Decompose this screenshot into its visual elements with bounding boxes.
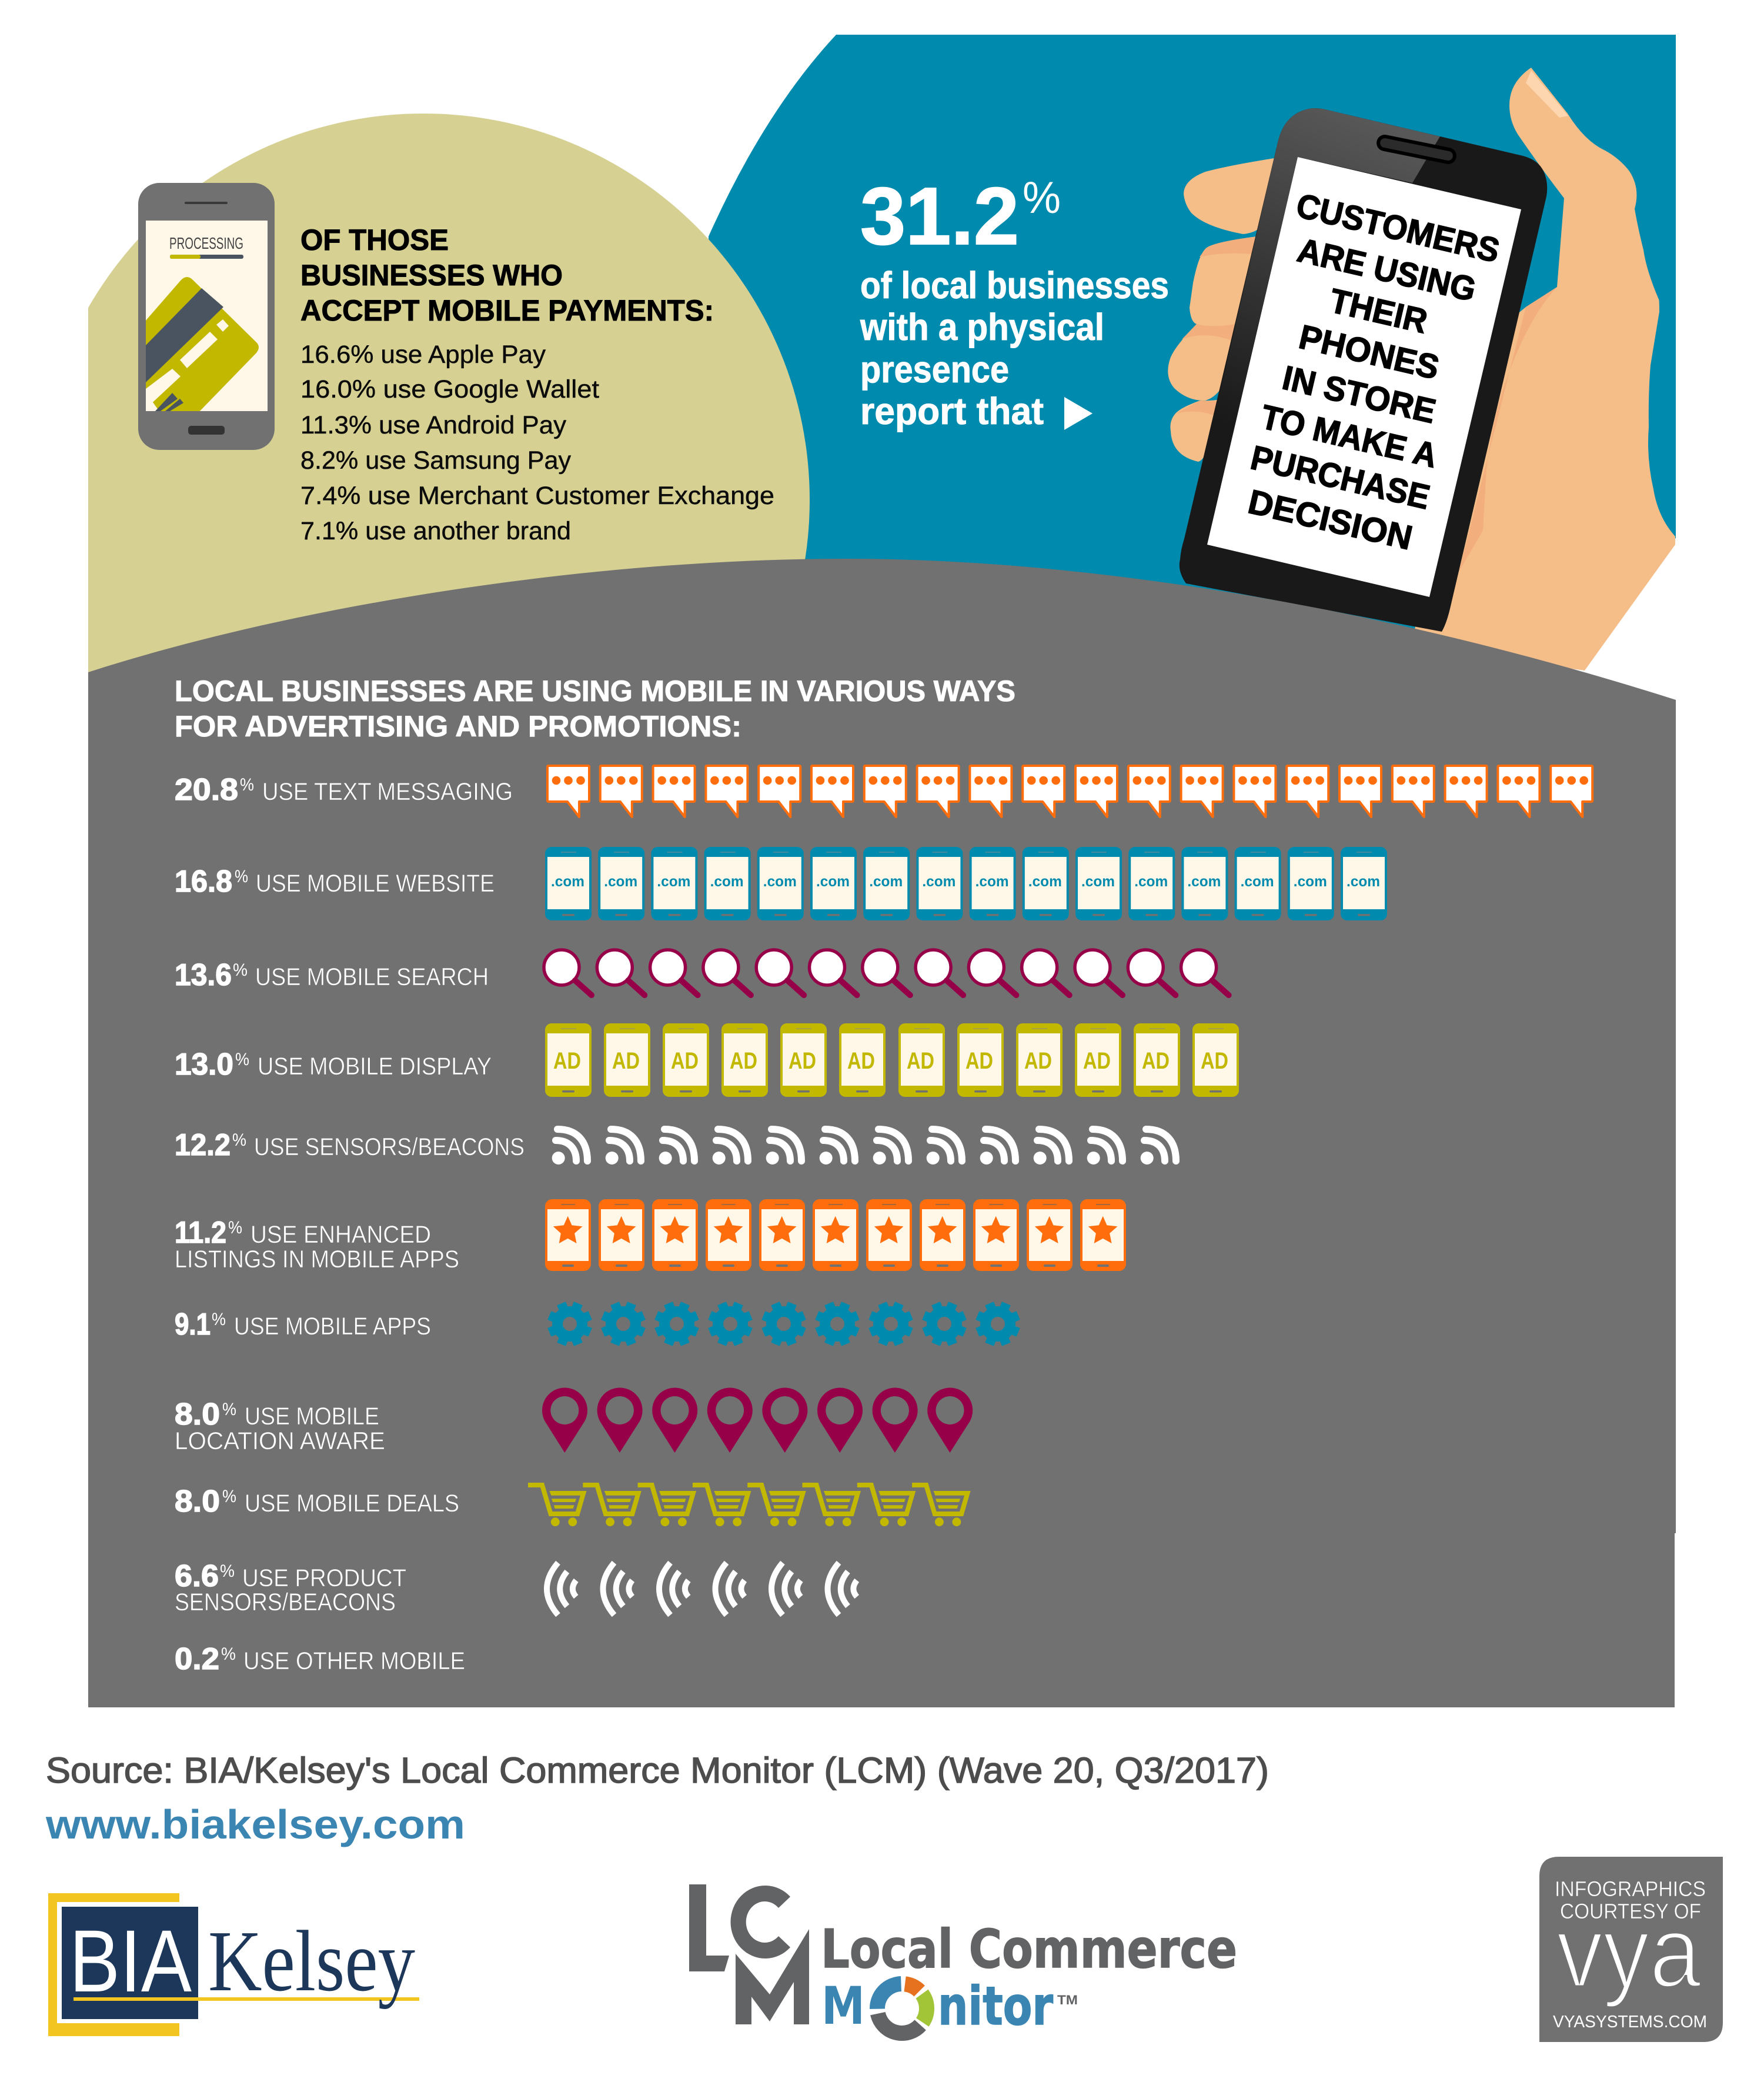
label: 12.2% sensors/beacons: [175, 1128, 524, 1162]
logo: VYA badge: VYASYSTEMS.COM: [1553, 2013, 1707, 2031]
icons: .com phones: .com: [1241, 873, 1274, 890]
label: 20.8% text messaging: USE TEXT MESSAGING: [262, 778, 513, 805]
label: 8.0% location aware: LOCATION AWARE: [175, 1427, 385, 1454]
label: 11.2% enhanced listings: USE ENHANCED: [250, 1220, 431, 1248]
label: 0.2% other mobile: 0.2: [175, 1642, 219, 1676]
icons: star phones: [545, 1199, 1126, 1271]
icons: .com phones: .com: [604, 873, 637, 890]
phone screen text block: ARE USING: [1294, 231, 1479, 309]
logo: VYA badge: [1539, 1857, 1723, 2042]
icons: .com phones: .com: [975, 873, 1009, 890]
label: 16.8% mobile website: [175, 865, 495, 899]
label: 9.1% mobile apps: 9.1: [175, 1307, 211, 1342]
text block: mobile payment list: 16.0% use Google Wallet: [300, 375, 599, 403]
phone speaker: [1377, 135, 1456, 164]
icons: AD phones: AD: [1024, 1048, 1052, 1074]
icons: .com phones: .com: [1294, 873, 1327, 890]
heading: of those businesses: BUSINESSES WHO: [300, 259, 563, 292]
label: 11.2% enhanced listings: LISTINGS IN MOBILE APPS: [175, 1245, 459, 1273]
label: 6.6% product sensors/beacons: [175, 1559, 406, 1616]
text block: mobile payment list: 7.4% use Merchant Customer Exchange: [300, 482, 774, 510]
icons: .com phones: .com: [1134, 873, 1168, 890]
icons: AD phones: [545, 1023, 1239, 1097]
arrow: [1064, 397, 1093, 430]
heading: local businesses using mobile: LOCAL BUSINESSES ARE USING MOBILE IN VARIOUS WAYS: [175, 675, 1015, 708]
label: 0.2% other mobile: %: [221, 1644, 236, 1664]
logo: VYA badge: vya: [1556, 1894, 1702, 2008]
label: 11.2% enhanced listings: %: [228, 1218, 242, 1237]
label: 13.6% mobile search: %: [233, 960, 248, 980]
icons: AD phones: AD: [965, 1048, 993, 1074]
icons: .com phones: .com: [1347, 873, 1380, 890]
label: 16.8% mobile website: 16.8: [175, 865, 232, 899]
label: 0.2% other mobile: [175, 1642, 465, 1676]
heading: of those businesses: OF THOSE: [300, 223, 449, 256]
icons: .com phones: .com: [657, 873, 690, 890]
label: 16.8% mobile website: USE MOBILE WEBSITE: [256, 869, 495, 897]
label: 9.1% mobile apps: USE MOBILE APPS: [234, 1312, 431, 1340]
icons: .com phones: .com: [551, 873, 584, 890]
label: 16.8% mobile website: %: [235, 867, 248, 886]
text block: mobile payment list: 11.3% use Android Pay: [300, 411, 567, 439]
icons: .com phones: .com: [763, 873, 797, 890]
logo: VYA badge: INFOGRAPHICS: [1555, 1877, 1706, 1901]
icons: AD phones: AD: [789, 1048, 816, 1074]
label: 12.2% sensors/beacons: %: [232, 1130, 246, 1150]
source line: Source: BIA/Kelsey's Local Commerce Monitor (LCM) (Wave 20, Q3/2017): [46, 1750, 1269, 1790]
icons: AD phones: AD: [730, 1048, 757, 1074]
label: 20.8% text messaging: %: [240, 775, 254, 795]
icons: text message bubbles: [547, 766, 1592, 817]
website link: www.biakelsey.com: [45, 1801, 465, 1847]
text block: mobile payment list: 8.2% use Samsung Pay: [300, 446, 571, 475]
icons: AD phones: AD: [1201, 1048, 1228, 1074]
icons: shopping carts: [528, 1483, 971, 1526]
icons: .com phones: .com: [869, 873, 903, 890]
label: 11.2% enhanced listings: [175, 1216, 459, 1273]
icons: AD phones: AD: [907, 1048, 934, 1074]
icons: .com phones: .com: [1187, 873, 1221, 890]
label: 13.6% mobile search: [175, 958, 489, 992]
label: 8.0% location aware: USE MOBILE: [245, 1402, 379, 1430]
phone screen text block: CUSTOMERS: [1293, 186, 1503, 270]
label: 12.2% sensors/beacons: USE SENSORS/BEACONS: [254, 1133, 524, 1160]
logo: BIA Kelsey: BIA: [69, 1911, 192, 2010]
label: 8.0% mobile deals: %: [222, 1487, 236, 1506]
logo: Local Commerce Monitor: TM: [1057, 1993, 1078, 2007]
callout: 31.2%: %: [1023, 173, 1061, 223]
callout: 31.2%: report that: [860, 390, 1044, 432]
icons: AD phones: AD: [847, 1048, 875, 1074]
label: 13.0% mobile display: 13.0: [175, 1047, 233, 1082]
label: 0.2% other mobile: USE OTHER MOBILE: [243, 1647, 465, 1674]
logo: BIA Kelsey: Kelsey: [208, 1913, 415, 2010]
callout: 31.2%: of local businesses: [860, 264, 1169, 306]
label: 9.1% mobile apps: %: [212, 1310, 226, 1329]
label: 6.6% product sensors/beacons: USE PRODUCT: [242, 1564, 406, 1591]
heading: of those businesses: [300, 223, 714, 327]
label: 9.1% mobile apps: [175, 1307, 431, 1342]
icons: magnifying glasses: [544, 950, 1229, 995]
label: 8.0% mobile deals: USE MOBILE DEALS: [245, 1489, 459, 1517]
icons: AD phones: AD: [671, 1048, 699, 1074]
icon: payment phone: PROCESSING: [169, 234, 243, 252]
logo: BIA Kelsey: [48, 1893, 419, 2036]
icons: AD phones: AD: [612, 1048, 640, 1074]
icon: payment phone: [138, 183, 275, 450]
icons: AD phones: AD: [1083, 1048, 1111, 1074]
icons: .com phones: [545, 847, 1387, 920]
logo: Local Commerce Monitor: M: [821, 1976, 865, 2036]
label: 20.8% text messaging: [175, 773, 513, 807]
heading: local businesses using mobile: FOR ADVERTISING AND PROMOTIONS:: [175, 710, 741, 743]
label: 13.0% mobile display: USE MOBILE DISPLAY: [258, 1052, 492, 1080]
label: 8.0% location aware: 8.0: [175, 1397, 220, 1432]
text block: mobile payment list: 16.6% use Apple Pay: [300, 341, 546, 369]
phone screen text block: IN STORE: [1279, 359, 1439, 431]
phone screen text block: [1207, 157, 1521, 597]
phone screen text block: THEIR: [1326, 281, 1431, 341]
label: 13.0% mobile display: [175, 1047, 492, 1082]
logo: Local Commerce Monitor: [689, 1884, 1237, 2037]
label: 13.0% mobile display: %: [235, 1050, 249, 1069]
icons: proximity waves: [547, 1563, 857, 1615]
label: 8.0% mobile deals: 8.0: [175, 1484, 220, 1519]
icons: signal beacons: [552, 1129, 1176, 1165]
label: 6.6% product sensors/beacons: 6.6: [175, 1559, 219, 1593]
heading: of those businesses: ACCEPT MOBILE PAYMENTS:: [300, 294, 714, 327]
text block: mobile payment list: 7.1% use another brand: [300, 517, 571, 545]
label: 6.6% product sensors/beacons: SENSORS/BEACONS: [175, 1588, 396, 1616]
phone screen text block: PHONES: [1295, 318, 1443, 387]
callout: 31.2%: with a physical: [860, 306, 1104, 348]
icons: AD phones: AD: [553, 1048, 581, 1074]
icon: hand holding phone (back): [1168, 68, 1675, 670]
label: 8.0% mobile deals: [175, 1484, 459, 1519]
icon: phone in hand: [1180, 108, 1547, 632]
icons: AD phones: AD: [1142, 1048, 1170, 1074]
logo: VYA badge: COURTESY OF: [1560, 1899, 1701, 1923]
logo: Local Commerce Monitor: Local Commerce: [821, 1918, 1237, 1980]
label: 12.2% sensors/beacons: 12.2: [175, 1128, 230, 1162]
label: 8.0% location aware: %: [222, 1400, 236, 1419]
logo: Local Commerce Monitor: nitor: [938, 1976, 1053, 2037]
icons: .com phones: .com: [816, 873, 850, 890]
icons: .com phones: .com: [922, 873, 956, 890]
label: 6.6% product sensors/beacons: %: [220, 1562, 235, 1581]
callout: 31.2%: [860, 171, 1169, 432]
icons: .com phones: .com: [710, 873, 744, 890]
icons: .com phones: .com: [1081, 873, 1115, 890]
panel: gray main panel: [88, 559, 1676, 1707]
label: 20.8% text messaging: 20.8: [175, 773, 238, 807]
callout: 31.2%: 31.2: [860, 171, 1019, 262]
text block: mobile payment list: [300, 341, 774, 545]
panel: blue background: [709, 35, 1676, 647]
label: 8.0% location aware: [175, 1397, 385, 1454]
phone screen text block: PURCHASE: [1247, 438, 1434, 517]
callout: 31.2%: presence: [860, 348, 1009, 391]
phone screen text block: DECISION: [1245, 482, 1416, 558]
label: 13.6% mobile search: 13.6: [175, 958, 232, 992]
phone screen text block: TO MAKE A: [1257, 398, 1441, 475]
label: 13.6% mobile search: USE MOBILE SEARCH: [255, 963, 489, 990]
icons: gears: [547, 1302, 1020, 1346]
heading: local businesses using mobile: [175, 675, 1015, 743]
icons: location pins: [542, 1388, 973, 1453]
panel: olive circle: [88, 114, 810, 672]
label: 11.2% enhanced listings: 11.2: [175, 1216, 226, 1250]
icons: .com phones: .com: [1028, 873, 1062, 890]
